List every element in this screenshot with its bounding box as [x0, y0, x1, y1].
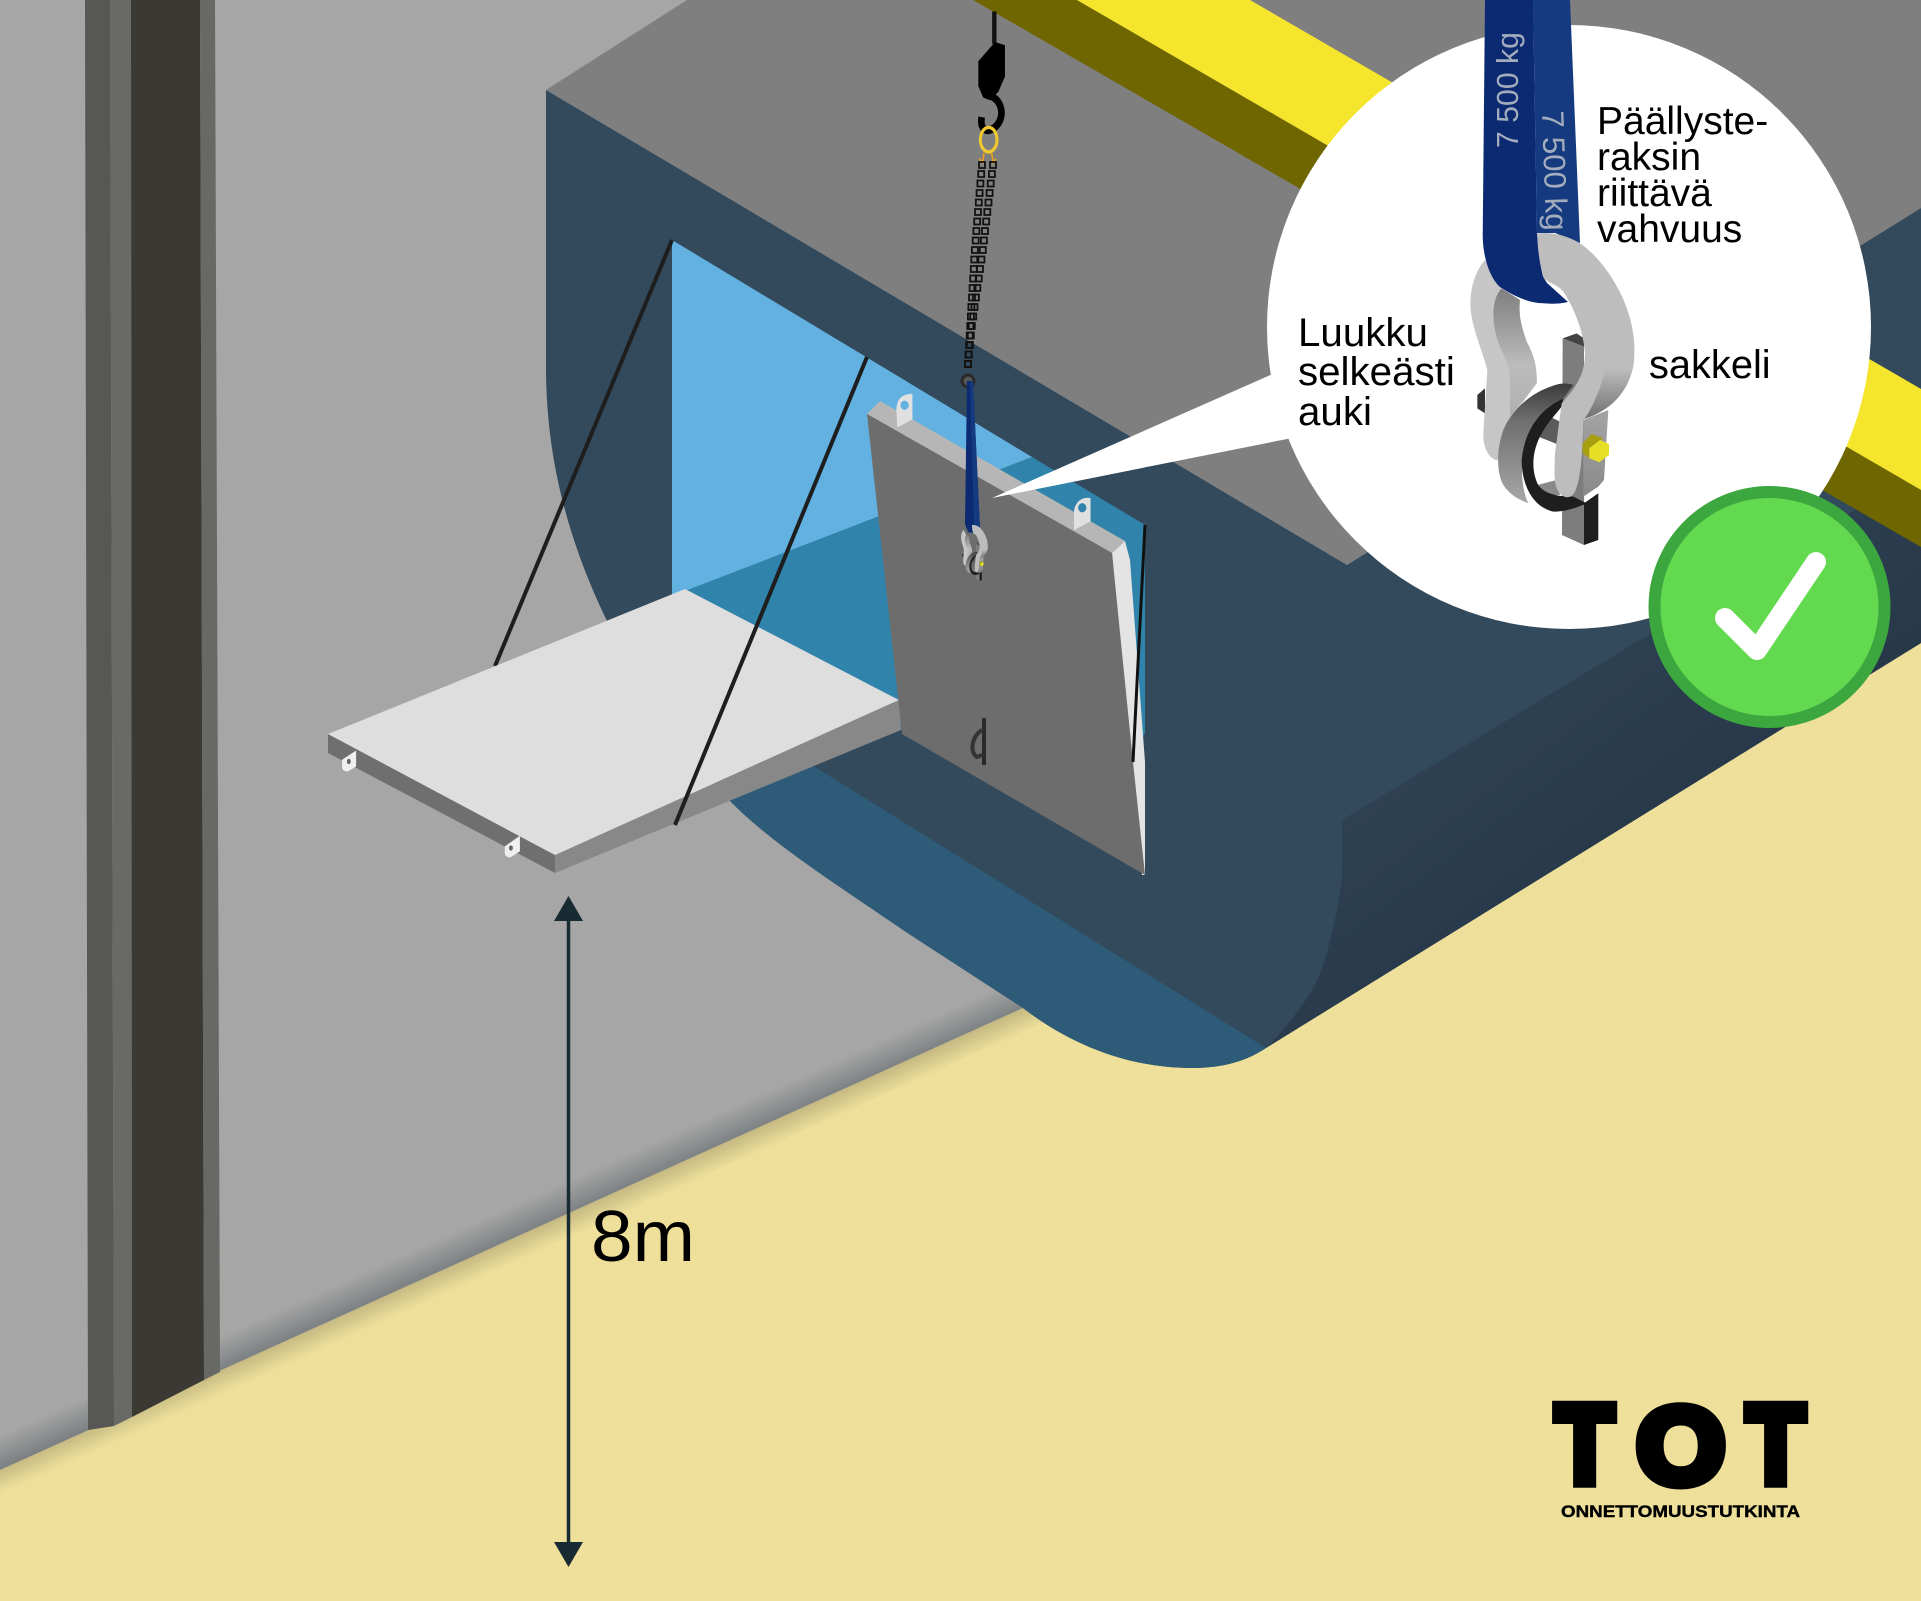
column [85, 0, 220, 1430]
crane hook [978, 11, 1005, 130]
hull darker side face [1266, 470, 1921, 1048]
lug on lying hatch right [505, 836, 520, 857]
logo TOT: T [1747, 1383, 1804, 1506]
callout: zoom circle with pointer [992, 0, 1871, 629]
wire left [495, 240, 672, 666]
floor shadow along wall line [0, 973, 1109, 1517]
label: sakkeli: sakkeli [1649, 343, 1771, 387]
small shackle front [972, 525, 988, 572]
logo TOT: T [1556, 1383, 1613, 1506]
logo TOT: O [1637, 1386, 1725, 1506]
label: luukku selkeasti auki: Luukku [1298, 310, 1428, 355]
lifting chains [965, 162, 996, 367]
label: paallysteraksin vahvuus: Päällyste- [1597, 100, 1768, 143]
label: paallysteraksin vahvuus: riittävä [1597, 172, 1712, 215]
floor [0, 643, 1921, 1601]
ship hull top surface [546, 0, 1921, 565]
label: luukku selkeasti auki: selkeästi [1298, 349, 1455, 394]
lug on raised hatch right [1074, 498, 1091, 530]
wall shadow along floor line [0, 944, 1100, 1497]
lying hatch cover [328, 589, 901, 873]
wire middle [675, 357, 867, 825]
ship hull dark face [546, 90, 1921, 1068]
hatch opening light blue [672, 240, 1032, 600]
sling load text right: 7 500 kg [1535, 110, 1574, 231]
height arrow [554, 896, 583, 1567]
chain end ring [962, 375, 974, 387]
sling load text left: 7 500 kg [1490, 32, 1525, 148]
wire right [1133, 525, 1145, 762]
large shackle front [1537, 233, 1634, 497]
large shackle back [1470, 260, 1608, 545]
small blue sling [965, 381, 980, 534]
green check badge [1654, 492, 1884, 722]
logo TOT [1556, 1383, 1804, 1521]
hatch opening teal floor [672, 457, 1145, 800]
raised hatch cover [867, 394, 1145, 875]
lug on raised hatch left [896, 394, 912, 427]
large blue sling [1483, 0, 1580, 304]
yellow beam [973, 0, 1921, 547]
lug on lying hatch left [342, 750, 356, 771]
yellow master link [979, 127, 997, 163]
height label: 8m [591, 1197, 695, 1277]
small shackle back [961, 530, 984, 581]
label: paallysteraksin vahvuus: raksin [1597, 136, 1701, 179]
logo subtitle: ONNETTOMUUSTUTKINTA [1561, 1502, 1800, 1521]
label: paallysteraksin vahvuus: vahvuus [1597, 208, 1742, 251]
hull lower teal band [730, 766, 1266, 1068]
label: luukku selkeasti auki: auki [1298, 389, 1372, 434]
lower handle on raised hatch [972, 718, 986, 765]
